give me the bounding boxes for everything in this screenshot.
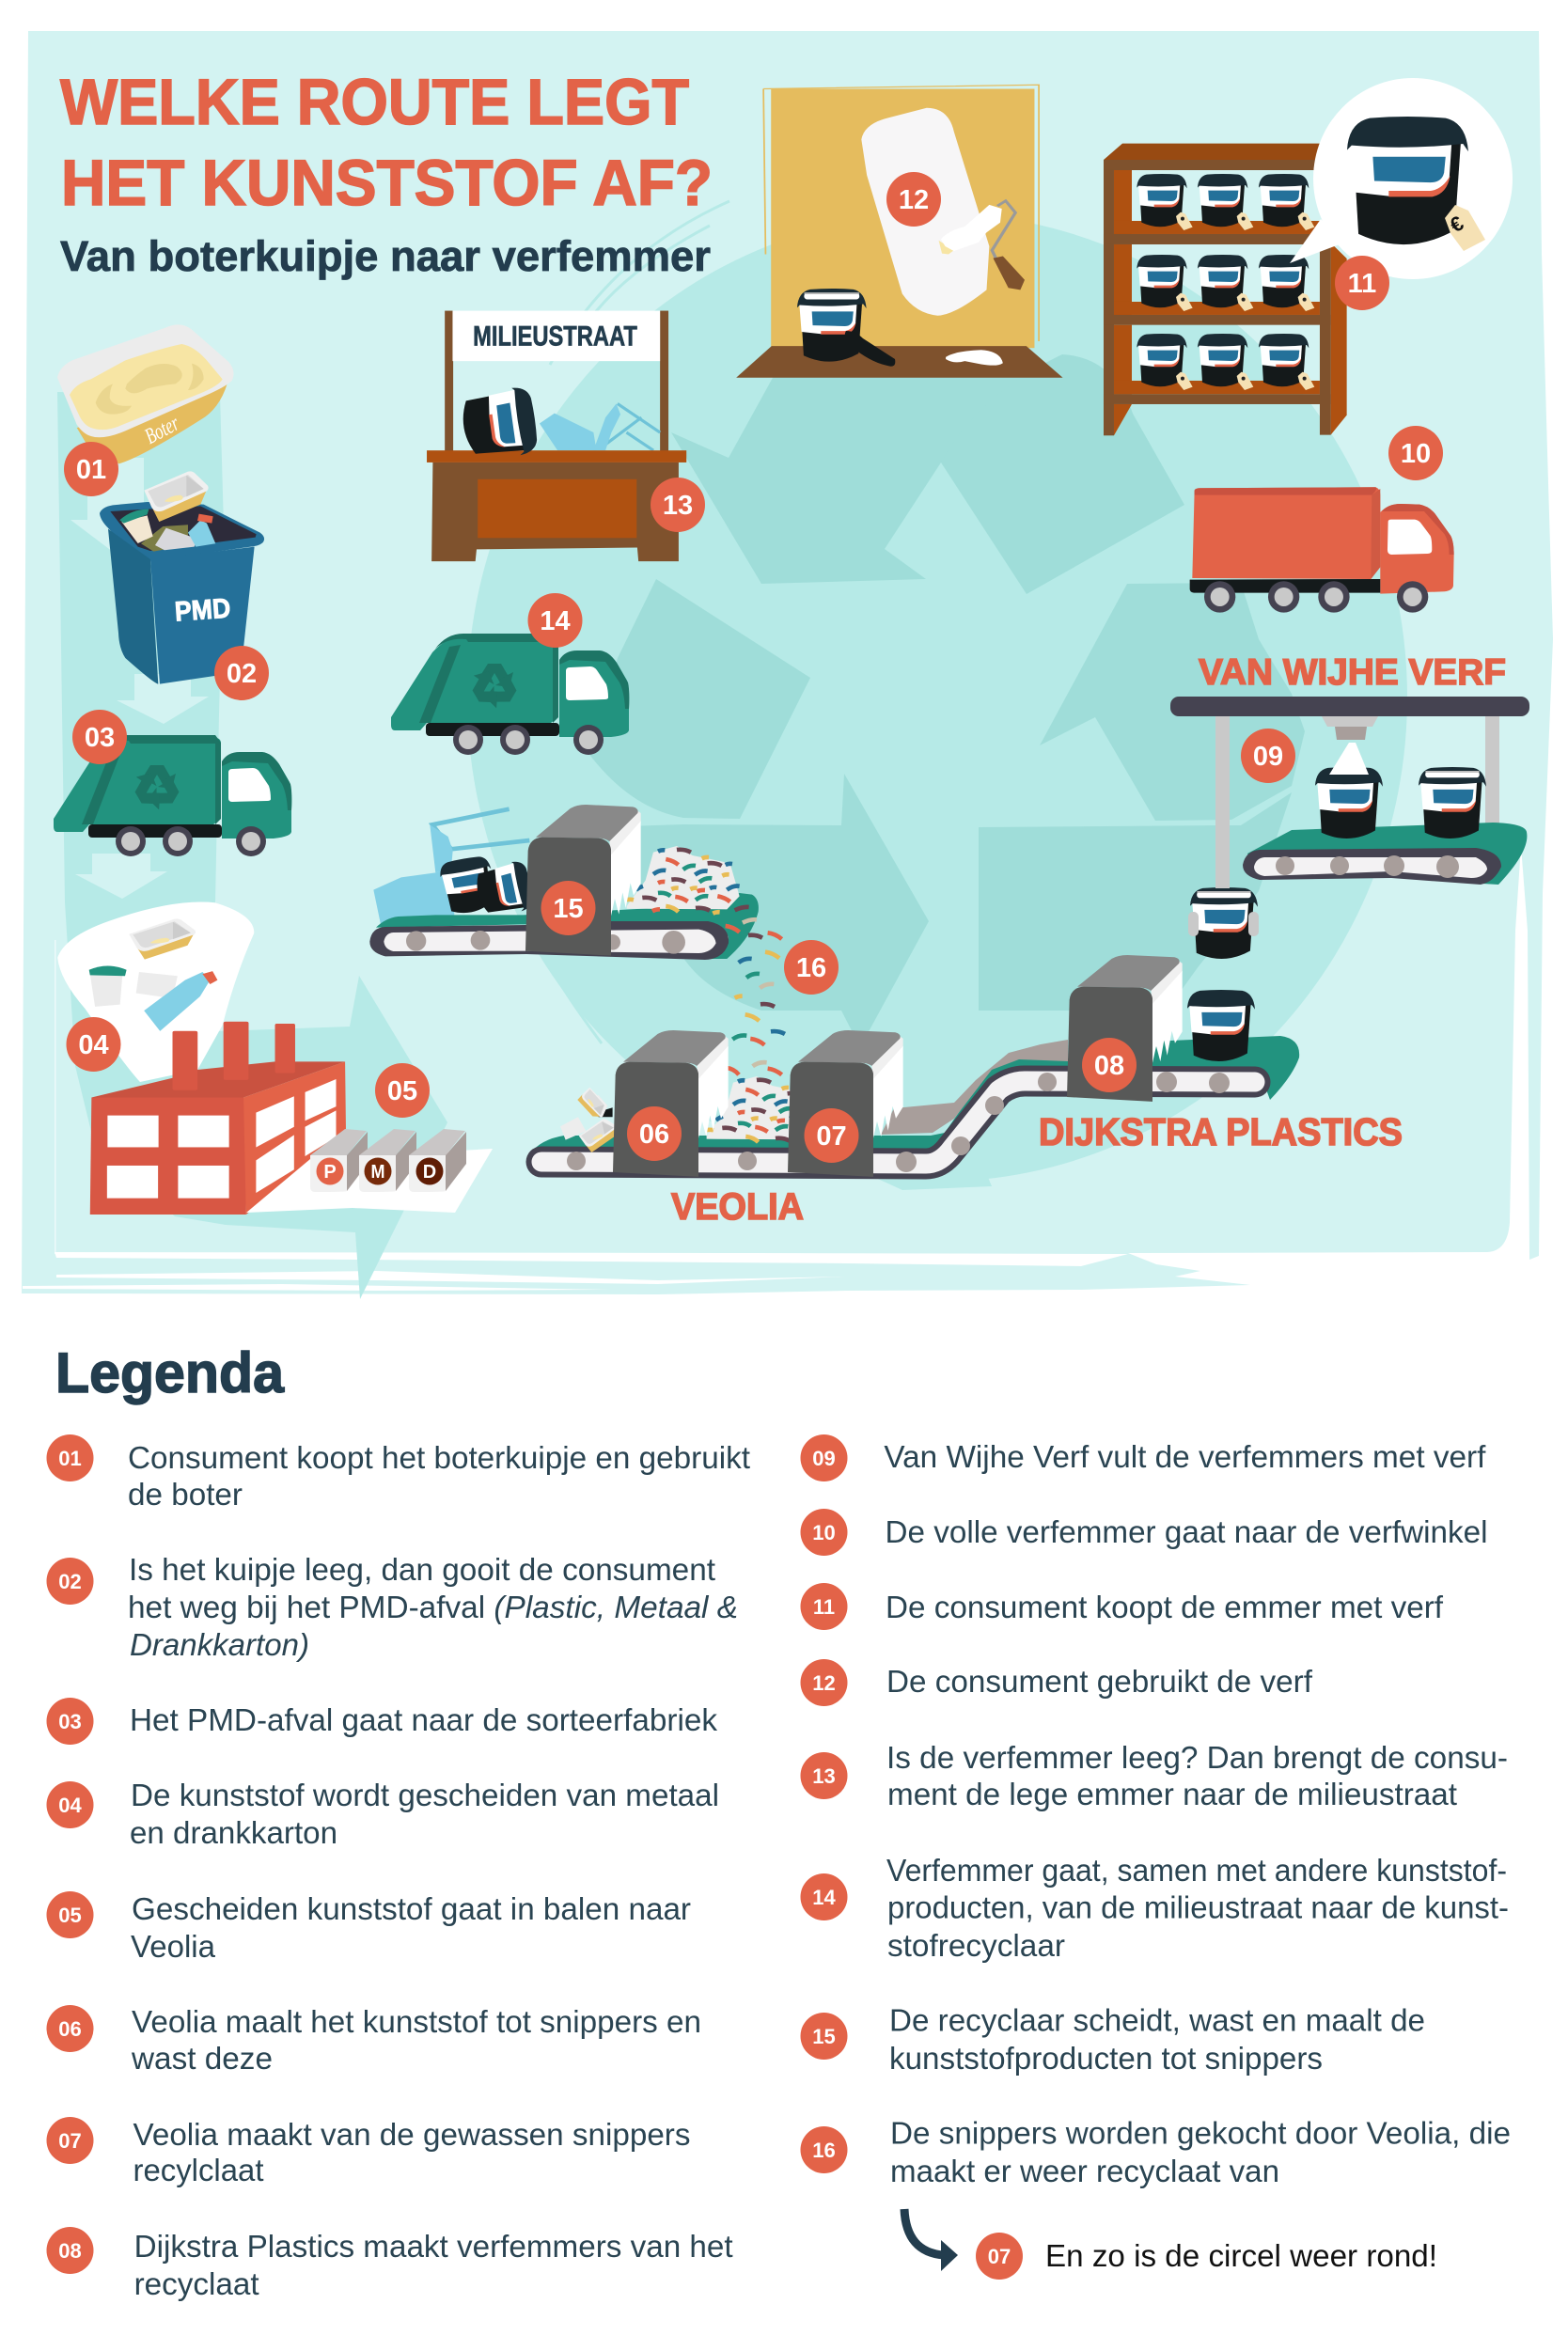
step 11: shelf with paint buckets [1104, 144, 1347, 435]
legend item 08: 08 [58, 2239, 82, 2263]
step 13: milieustraat stand [427, 311, 686, 561]
legend item 03 [47, 1698, 717, 1745]
bucket on conveyor 08 [1187, 990, 1255, 1061]
legend item 05: Veolia [131, 1929, 216, 1964]
step 16: falling chips [727, 933, 785, 1074]
legend item 09: Van Wijhe Verf vult de verfemmers met verf [884, 1439, 1486, 1474]
arrow to closing line [904, 2209, 958, 2271]
speech bubble with price-tagged bucket: € [1446, 212, 1467, 237]
legend item 16: maakt er weer recyclaat van [890, 2154, 1279, 2188]
map step number badges: 07 [816, 1121, 847, 1152]
legend item 10: 10 [812, 1521, 836, 1544]
subtitle: Van boterkuipje naar verfemmer [60, 232, 711, 280]
company label: Veolia: VEOLIA [671, 1186, 804, 1228]
map step number badges: 14 [540, 606, 571, 636]
legend item 01: de boter [128, 1477, 243, 1512]
press machine 07 [788, 1030, 903, 1177]
legend item 06: Veolia maalt het kunststof tot snippers en [132, 2004, 701, 2039]
legend item 13: ment de lege emmer naar de milieustraat [887, 1777, 1457, 1811]
legend item 15: kunststofproducten tot snippers [889, 2041, 1323, 2076]
legend item 14 [801, 1853, 1509, 1963]
map step number badges: 09 [1253, 742, 1283, 772]
legend item 16 [801, 2116, 1511, 2188]
closing line with badge 07: En zo is de circel weer rond! [1045, 2238, 1437, 2273]
legend item 13: Is de verfemmer leeg? Dan brengt de consu- [886, 1740, 1508, 1775]
legend item 05 [47, 1891, 691, 1964]
legend item 14: stofrecyclaar [887, 1928, 1065, 1963]
map background panel [22, 31, 1553, 1294]
title: WELKE ROUTE LEGT [60, 66, 689, 138]
step 9: paint filling line [1170, 697, 1529, 888]
legend item 11 [801, 1583, 1444, 1630]
step 2: PMD bin: PMD [174, 593, 231, 628]
step 15: recycler conveyor with buckets and chips [369, 809, 759, 960]
legend item 11: De consument koopt de emmer met verf [886, 1590, 1444, 1624]
legend item 01: Consument koopt het boterkuipje en gebruikt [128, 1440, 750, 1475]
press machine 06 [613, 1030, 729, 1177]
legend item 06 [47, 2004, 701, 2076]
open paint bucket with brush [797, 289, 895, 367]
step 6: discarded products and chips at press [560, 1076, 820, 1154]
legend item 04: en drankkarton [130, 1815, 337, 1850]
step 1: butter tub [57, 324, 234, 463]
step 6-8: long conveyor belt with gravel [529, 1036, 1299, 1172]
legend item 07: recylclaat [133, 2153, 263, 2187]
legend item 16: 16 [812, 2139, 836, 2162]
closing line with badge 07: 07 [988, 2245, 1011, 2268]
legend item 01 [47, 1434, 750, 1512]
legend item 14: producten, van de milieustraat naar de kunst- [887, 1889, 1509, 1925]
title [60, 66, 713, 219]
legend item 02: Drankkarton) [130, 1627, 309, 1662]
step 5: bales P M D: D [423, 1162, 436, 1183]
company label: Dijkstra Plastics: DIJKSTRA PLASTICS [1039, 1110, 1403, 1153]
legend item 12 [801, 1659, 1313, 1706]
speech bubble with price-tagged bucket [1290, 78, 1513, 279]
legend item 02 [47, 1552, 738, 1662]
map step number badges: 15 [553, 894, 584, 924]
legend item 07: Veolia maakt van de gewassen snippers [133, 2117, 690, 2152]
map step number badges [64, 172, 1443, 1163]
map step number badges: 01 [76, 455, 106, 485]
legend item 12: 12 [812, 1671, 836, 1695]
map step number badges: 16 [796, 953, 826, 983]
closing line with badge 07 [976, 2233, 1437, 2280]
background brush streak under belt [870, 1175, 992, 1190]
legend item 12: De consument gebruikt de verf [886, 1664, 1313, 1699]
step 2: PMD bin [100, 471, 264, 684]
step 5: bales P M D [246, 1129, 493, 1213]
press machine 15 [525, 805, 641, 956]
legend item 04: De kunststof wordt gescheiden van metaal [131, 1778, 719, 1812]
large background circle [467, 213, 1407, 1182]
map step number badges: 10 [1401, 439, 1431, 469]
background route arrow: left path to factory [57, 392, 447, 1299]
legend item 06: wast deze [131, 2041, 273, 2076]
step 13: milieustraat stand: MILIEUSTRAAT [473, 321, 637, 353]
step 1: butter tub: Boter [141, 411, 183, 449]
title: HET KUNSTSTOF AF? [61, 147, 713, 219]
map step number badges: 06 [639, 1120, 669, 1150]
legend item 03: 03 [58, 1710, 82, 1733]
legend item 03: Het PMD-afval gaat naar de sorteerfabriek [130, 1702, 717, 1737]
legend item 15 [801, 2002, 1425, 2076]
legend item 13 [801, 1740, 1508, 1811]
background streak: bottom edge [23, 940, 1128, 1291]
legend item 08 [47, 2227, 733, 2301]
legend item 07 [47, 2117, 690, 2187]
legend item 08: recyclaat [134, 2266, 259, 2301]
map step number badges: 04 [78, 1030, 109, 1060]
recycling symbol in background [588, 354, 1305, 1047]
legend heading: Legenda [55, 1341, 285, 1404]
legend item 02: 02 [58, 1570, 82, 1593]
step 14: garbage truck [391, 634, 629, 755]
step 5: bales P M D: M [370, 1162, 385, 1183]
legend item 14: Verfemmer gaat, samen met andere kunststof- [886, 1853, 1507, 1888]
legend item 05: 05 [58, 1904, 82, 1927]
legend item 07: 07 [58, 2129, 82, 2153]
legend item 04: 04 [58, 1794, 82, 1817]
map step number badges: 08 [1094, 1051, 1124, 1081]
legend item 02: het weg bij het PMD-afval (Plastic, Metaal & [128, 1590, 738, 1624]
legend item 11: 11 [813, 1595, 835, 1619]
legend item 10 [801, 1509, 1487, 1556]
press machine 08 [1067, 955, 1183, 1102]
legend item 04 [47, 1778, 719, 1850]
legend item 15: 15 [812, 2025, 836, 2048]
background chevrons on left path [71, 458, 209, 899]
step 12: painted wall with roller and bucket [736, 85, 1063, 378]
map step number badges: 05 [387, 1076, 417, 1106]
map step number badges: 13 [663, 491, 693, 521]
step 4: factory with sorted waste [57, 901, 346, 1215]
legend item 10: De volle verfemmer gaat naar de verfwinkel [886, 1514, 1487, 1549]
legend item 13: 13 [812, 1764, 836, 1788]
legend item 02: Is het kuipje leeg, dan gooit de consument [129, 1552, 715, 1587]
step 10: delivery truck [1190, 487, 1454, 613]
map step number badges: 11 [1348, 269, 1376, 299]
map step number badges: 12 [899, 185, 929, 215]
legend item 16: De snippers worden gekocht door Veolia, die [890, 2116, 1511, 2151]
bucket lifted by grabber [1188, 887, 1259, 959]
empty bucket on the stand [460, 385, 540, 462]
company label: Van Wijhe Verf: VAN WIJHE VERF [1199, 652, 1506, 693]
legend item 05: Gescheiden kunststof gaat in balen naar [132, 1891, 691, 1926]
legend item 15: De recyclaar scheidt, wast en maalt de [889, 2002, 1425, 2038]
legend item 06: 06 [58, 2017, 82, 2041]
legend item 09 [801, 1434, 1486, 1481]
legend item 08: Dijkstra Plastics maakt verfemmers van het [134, 2229, 733, 2264]
legend item 14: 14 [812, 1886, 836, 1909]
map step number badges: 02 [227, 659, 257, 689]
map step number badges: 03 [85, 723, 115, 753]
legend item 09: 09 [812, 1447, 836, 1470]
legend item 01: 01 [58, 1447, 82, 1470]
step 3: garbage truck [54, 735, 291, 856]
background brush strokes [505, 201, 729, 1043]
step 5: bales P M D: P [323, 1162, 337, 1183]
